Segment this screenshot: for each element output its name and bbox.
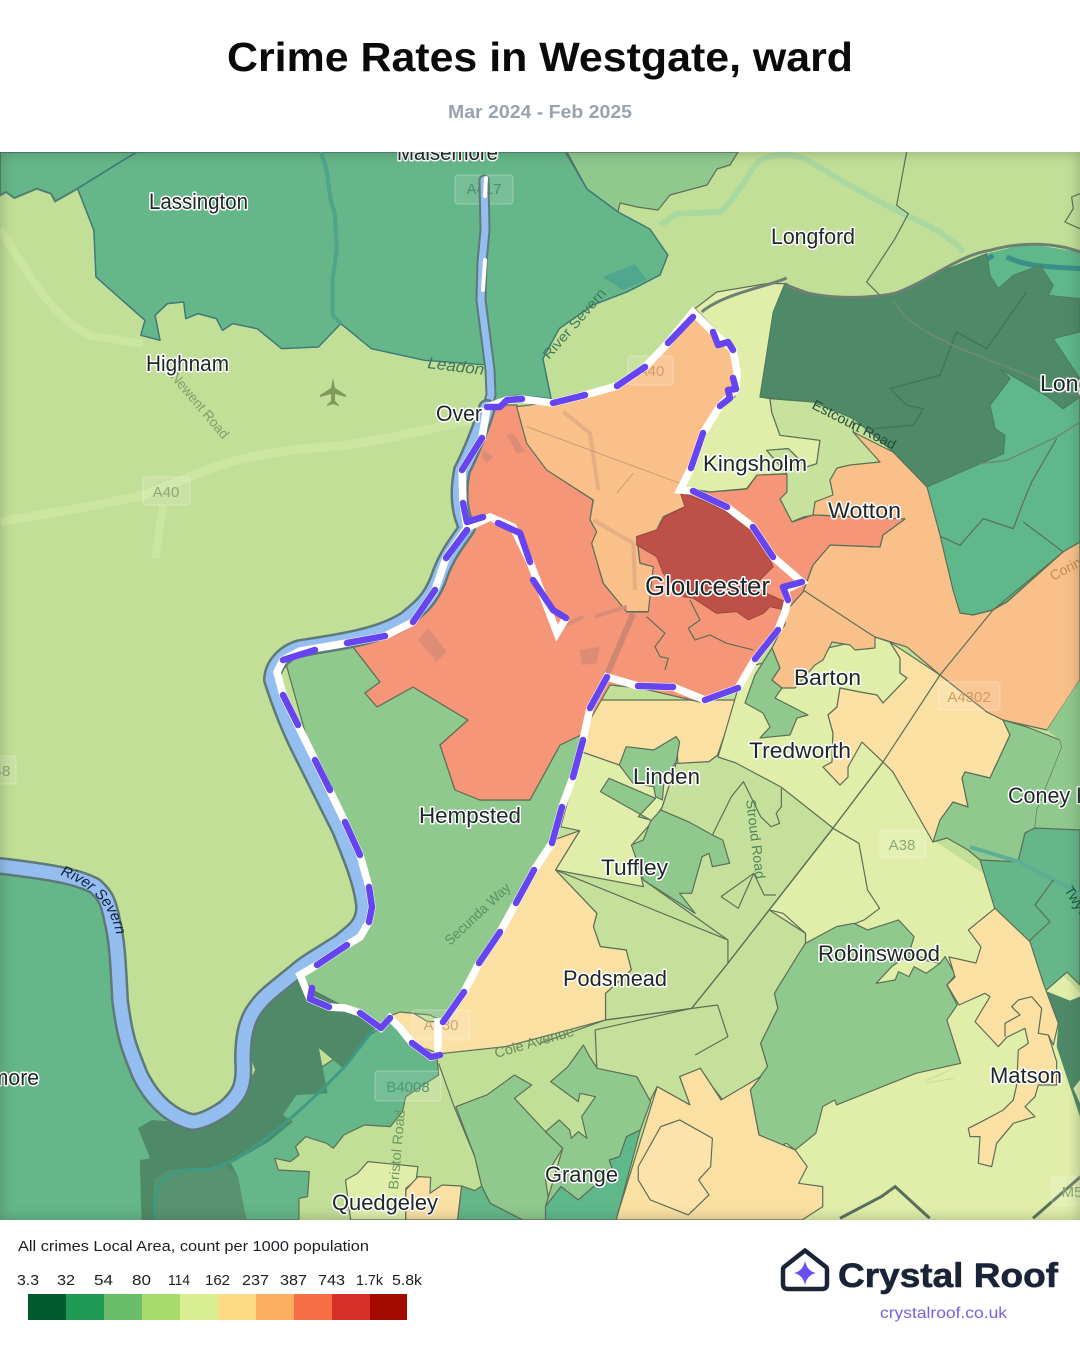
road and river name labels: Bristol Road xyxy=(385,1109,408,1190)
legend xyxy=(17,1238,423,1320)
place name labels: Podsmead xyxy=(563,966,667,991)
title: Crime Rates in Westgate, ward xyxy=(227,34,853,80)
place name labels: Kingsholm xyxy=(703,451,807,476)
Quedgeley and Grange wards xyxy=(216,1017,651,1220)
road shields: A40 xyxy=(153,484,179,501)
place name labels: Highnam xyxy=(146,351,229,376)
place name labels: Wotton xyxy=(828,498,901,523)
legend value labels: 3.3 xyxy=(17,1272,39,1289)
road and river name labels xyxy=(60,290,1080,1189)
place name labels: Maisemore xyxy=(397,140,498,165)
legend value labels: 1.7k xyxy=(356,1272,383,1289)
legend value labels: 80 xyxy=(132,1272,151,1289)
legend value labels xyxy=(17,1272,423,1289)
ward: pale Barton xyxy=(718,637,907,828)
place name labels: Over xyxy=(436,401,482,426)
ward: orange north-central xyxy=(517,312,735,612)
ward: light orange A4302 xyxy=(823,642,1010,842)
logo URL: crystalroof.co.uk xyxy=(880,1305,1008,1322)
place name labels: Quedgeley xyxy=(332,1190,438,1215)
road and river name labels: Cole Avenue xyxy=(492,1023,576,1061)
south-west districts xyxy=(0,875,168,1220)
road shields: A4302 xyxy=(947,689,991,706)
place name labels: Linden xyxy=(633,764,700,789)
logo wordmark: Crystal Roof xyxy=(838,1257,1059,1295)
road and river name labels: Newent Road xyxy=(168,369,233,442)
place name labels xyxy=(0,140,1080,1215)
legend value labels: 5.8k xyxy=(392,1272,423,1289)
high-crime central wards xyxy=(353,312,905,800)
legend title: All crimes Local Area, count per 1000 population xyxy=(18,1238,369,1255)
icon: airplane xyxy=(320,378,346,406)
place name labels: Grange xyxy=(545,1162,618,1187)
place name labels: Longford xyxy=(771,224,855,249)
legend value labels: 743 xyxy=(318,1272,345,1289)
Barton, Tredworth and Coney Hill wards xyxy=(718,432,1080,993)
place name labels: Gloucester xyxy=(645,571,770,601)
legend value labels: 162 xyxy=(205,1272,230,1289)
place name labels: Tredworth xyxy=(749,738,851,763)
road and river name labels: Estcourt Road xyxy=(810,396,899,452)
railway line xyxy=(692,552,1063,1008)
Westgate ward boundary: dashed purple on white xyxy=(277,312,802,1057)
legend value labels: 32 xyxy=(57,1272,75,1289)
dark district south of the river xyxy=(138,977,440,1220)
River Severn xyxy=(0,178,491,1122)
ward: north green above Longford xyxy=(567,152,738,212)
road and river name labels: Stroud Road xyxy=(743,798,769,880)
Hempsted ward xyxy=(285,647,581,1028)
place name labels: Hempsted xyxy=(419,803,521,828)
north-west districts xyxy=(0,152,668,559)
ward: dark red city centre xyxy=(637,492,785,620)
road shields: A430 xyxy=(423,1017,459,1034)
legend value labels: 387 xyxy=(280,1272,307,1289)
ward: green patch xyxy=(745,648,808,738)
road and river name labels: Secunda Way xyxy=(441,879,513,948)
ward: salmon west and central xyxy=(353,405,905,800)
subtitle: date range: Mar 2024 - Feb 2025 xyxy=(448,102,632,122)
road shields xyxy=(0,175,1080,1205)
north-east districts xyxy=(660,152,1080,615)
road and river name labels: River Severn xyxy=(60,866,124,934)
place name labels: Lassington xyxy=(149,189,248,214)
road and river name labels: Leadon xyxy=(427,355,485,379)
road shields: A417 xyxy=(466,181,502,198)
legend colour scale xyxy=(28,1294,407,1320)
Crystal Roof logo xyxy=(783,1250,1059,1322)
icon: house with star xyxy=(783,1250,827,1289)
road shields: A38 xyxy=(889,837,915,854)
place name labels: Matson xyxy=(990,1063,1062,1088)
south wards xyxy=(438,700,1080,1220)
road shields: A40 xyxy=(638,363,664,380)
place name labels: Barton xyxy=(794,665,861,690)
road shields: B4008 xyxy=(386,1079,430,1096)
choropleth map of Gloucester xyxy=(0,152,1080,1220)
legend value labels: 114 xyxy=(168,1272,190,1289)
road and river name labels: River Severn xyxy=(539,285,609,362)
Matson ward and south-east edge xyxy=(947,880,1080,1167)
legend value labels: 54 xyxy=(94,1272,113,1289)
ward: east orange xyxy=(772,432,1080,730)
ward: Coney Hill green xyxy=(933,720,1062,862)
legend value labels: 237 xyxy=(242,1272,269,1289)
place name labels: Tuffley xyxy=(601,855,668,880)
place name labels: Robinswood xyxy=(818,941,940,966)
